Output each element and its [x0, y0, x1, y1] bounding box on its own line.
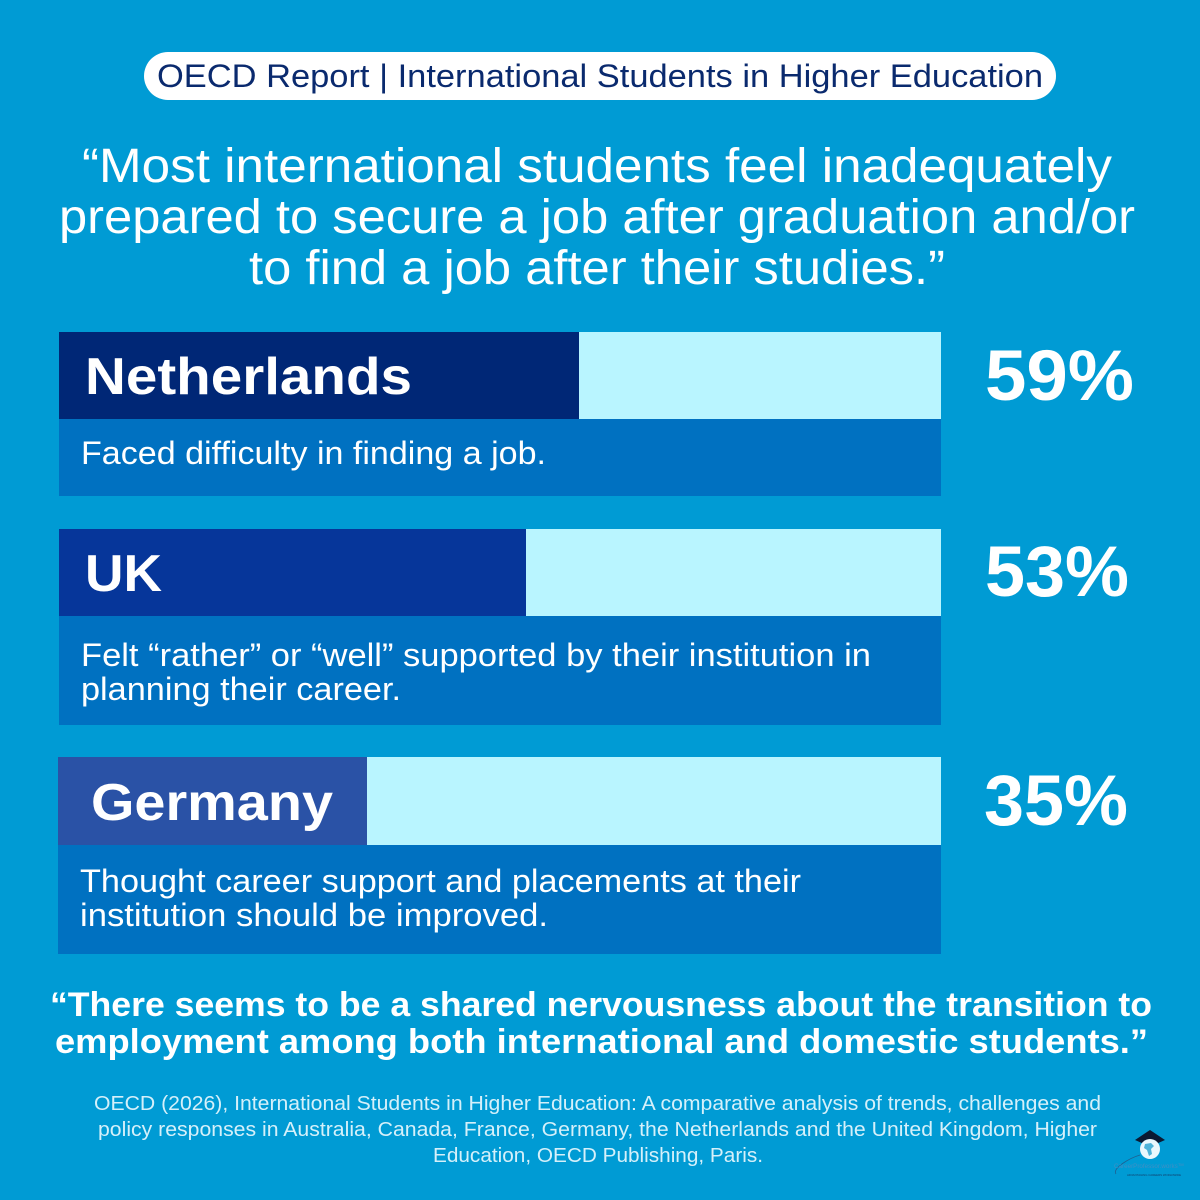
description: UK: Felt “rather” or “well” supported by their institution in [81, 637, 871, 673]
description box: UK [59, 616, 941, 725]
closing quote [50, 986, 1152, 1061]
headline quote [59, 140, 1135, 295]
logo tagline: ADVANTAGING CAREERS WORLDWIDE [1127, 1173, 1181, 1177]
description box: Germany [58, 845, 941, 954]
bar value: UK 53% [59, 529, 526, 616]
header pill [144, 52, 1056, 100]
value: 53%: 53% [985, 533, 1129, 612]
closing quote: “There seems to be a shared nervousness about the transition to [50, 986, 1152, 1024]
headline quote: “Most international students feel inadequately [82, 140, 1112, 193]
panel: Germany [58, 757, 1128, 954]
description box: Netherlands [59, 419, 941, 496]
description: UK: planning their career. [81, 671, 401, 707]
headline quote: prepared to secure a job after graduation and/or [59, 191, 1135, 244]
description: Germany [80, 863, 801, 933]
logo: CareerProfessor.works [1114, 1130, 1184, 1177]
bar track: Netherlands [59, 332, 941, 419]
bar value: Germany 35% [58, 757, 367, 845]
bar track: UK [59, 529, 941, 616]
value: 35%: 35% [984, 762, 1128, 841]
source citation: OECD (2026), International Students in Higher Education: A comparative analysis of trends, challenges and [94, 1093, 1101, 1115]
source citation [94, 1093, 1101, 1167]
logo swoosh [1115, 1155, 1140, 1174]
logo wordmark: CareerProfessor.works™ [1114, 1163, 1184, 1170]
description: Germany: Thought career support and placements at their [80, 863, 801, 899]
closing quote: employment among both international and domestic students.” [55, 1023, 1148, 1061]
description: Germany: institution should be improved. [80, 897, 548, 933]
label: Netherlands: Netherlands [85, 348, 412, 406]
source citation: Education, OECD Publishing, Paris. [433, 1145, 763, 1167]
panel: UK [59, 529, 1129, 725]
label: Germany: Germany [91, 774, 333, 832]
description: UK [81, 637, 871, 707]
description: Netherlands: Faced difficulty in finding a job. [81, 435, 546, 471]
label: UK: UK [85, 545, 162, 603]
source citation: policy responses in Australia, Canada, France, Germany, the Netherlands and the United Kingdom, Higher [98, 1119, 1097, 1141]
panel: Netherlands [59, 332, 1134, 496]
header pill: OECD Report | International Students in Higher Education [157, 58, 1043, 94]
bar track: Germany [58, 757, 941, 845]
value: 59%: 59% [985, 337, 1134, 416]
bar value: Netherlands 59% [59, 332, 579, 419]
icon: globe [1140, 1139, 1160, 1159]
headline quote: to find a job after their studies.” [249, 242, 945, 295]
icon: graduation cap [1135, 1130, 1165, 1144]
